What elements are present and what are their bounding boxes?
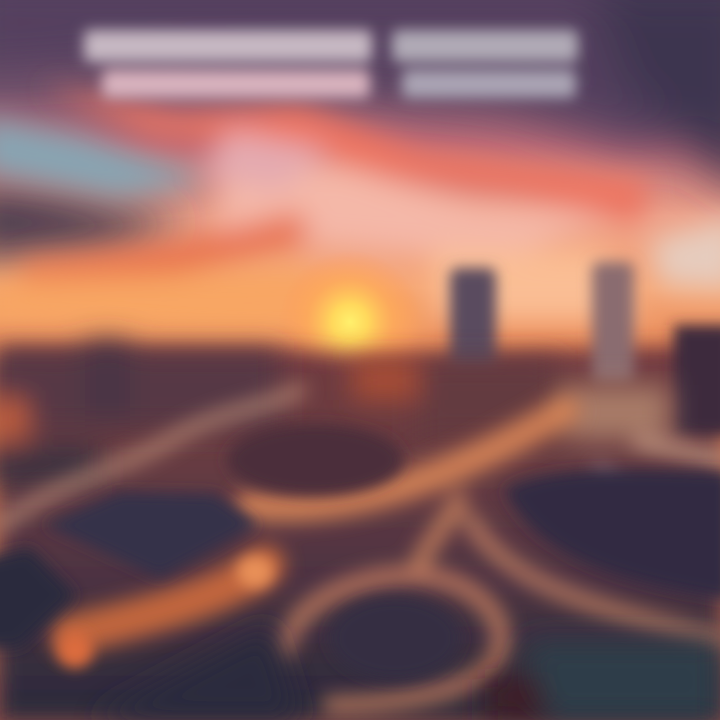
mid buildings: [352, 360, 670, 440]
building: right circular plaza: [505, 469, 720, 600]
sun: [278, 250, 422, 394]
tower right: [592, 262, 634, 382]
title line 1 left: [84, 30, 372, 62]
building: centre roof: [227, 424, 403, 496]
building: far left: [0, 548, 76, 648]
title: [84, 30, 578, 98]
bottom dark streets: [90, 625, 720, 720]
building: left roof: [45, 492, 258, 578]
warm lights: [57, 556, 273, 668]
title line 1 right: [392, 30, 578, 62]
sunset clouds: [0, 85, 720, 340]
left skyline: [0, 340, 280, 485]
dark clouds: [0, 0, 720, 258]
glowing roads: [0, 390, 720, 705]
title line 2 right: [402, 70, 576, 98]
ground: [0, 345, 720, 720]
tower far right: [674, 325, 720, 435]
right skyline towers: [450, 262, 720, 435]
blue sky patch: [0, 115, 215, 198]
title line 2 left: [102, 70, 370, 98]
building: bottom round roof: [329, 596, 461, 680]
tower centre: [450, 268, 496, 368]
